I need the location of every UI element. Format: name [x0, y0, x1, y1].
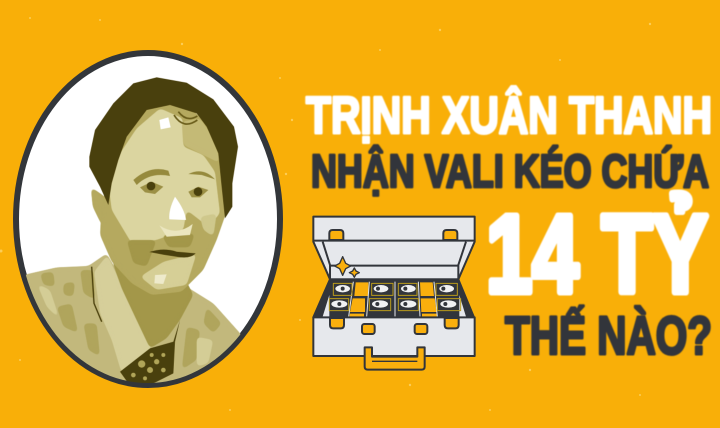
eyes: [140, 182, 208, 197]
hair: [89, 77, 238, 218]
face base: [100, 102, 226, 295]
lid clasps: [329, 230, 457, 240]
face light: [108, 108, 220, 243]
forehead highlight: [159, 117, 171, 129]
base clasps: [330, 318, 459, 328]
portrait: oval framed man: [16, 53, 280, 393]
lid: [313, 217, 475, 279]
tie: [120, 320, 180, 387]
mouth: [149, 250, 196, 257]
money tray: [313, 279, 474, 317]
ear: [91, 189, 104, 223]
nose: [169, 197, 186, 220]
handle: [365, 347, 425, 370]
collar: [94, 255, 152, 373]
neck: [112, 260, 193, 348]
case base: [313, 317, 475, 356]
eyebrows: [133, 169, 215, 185]
forehead curl: [174, 112, 197, 124]
shirt and shoulders: [23, 253, 242, 393]
icon: open briefcase full of money: [313, 217, 475, 370]
sparkles: [335, 257, 359, 277]
